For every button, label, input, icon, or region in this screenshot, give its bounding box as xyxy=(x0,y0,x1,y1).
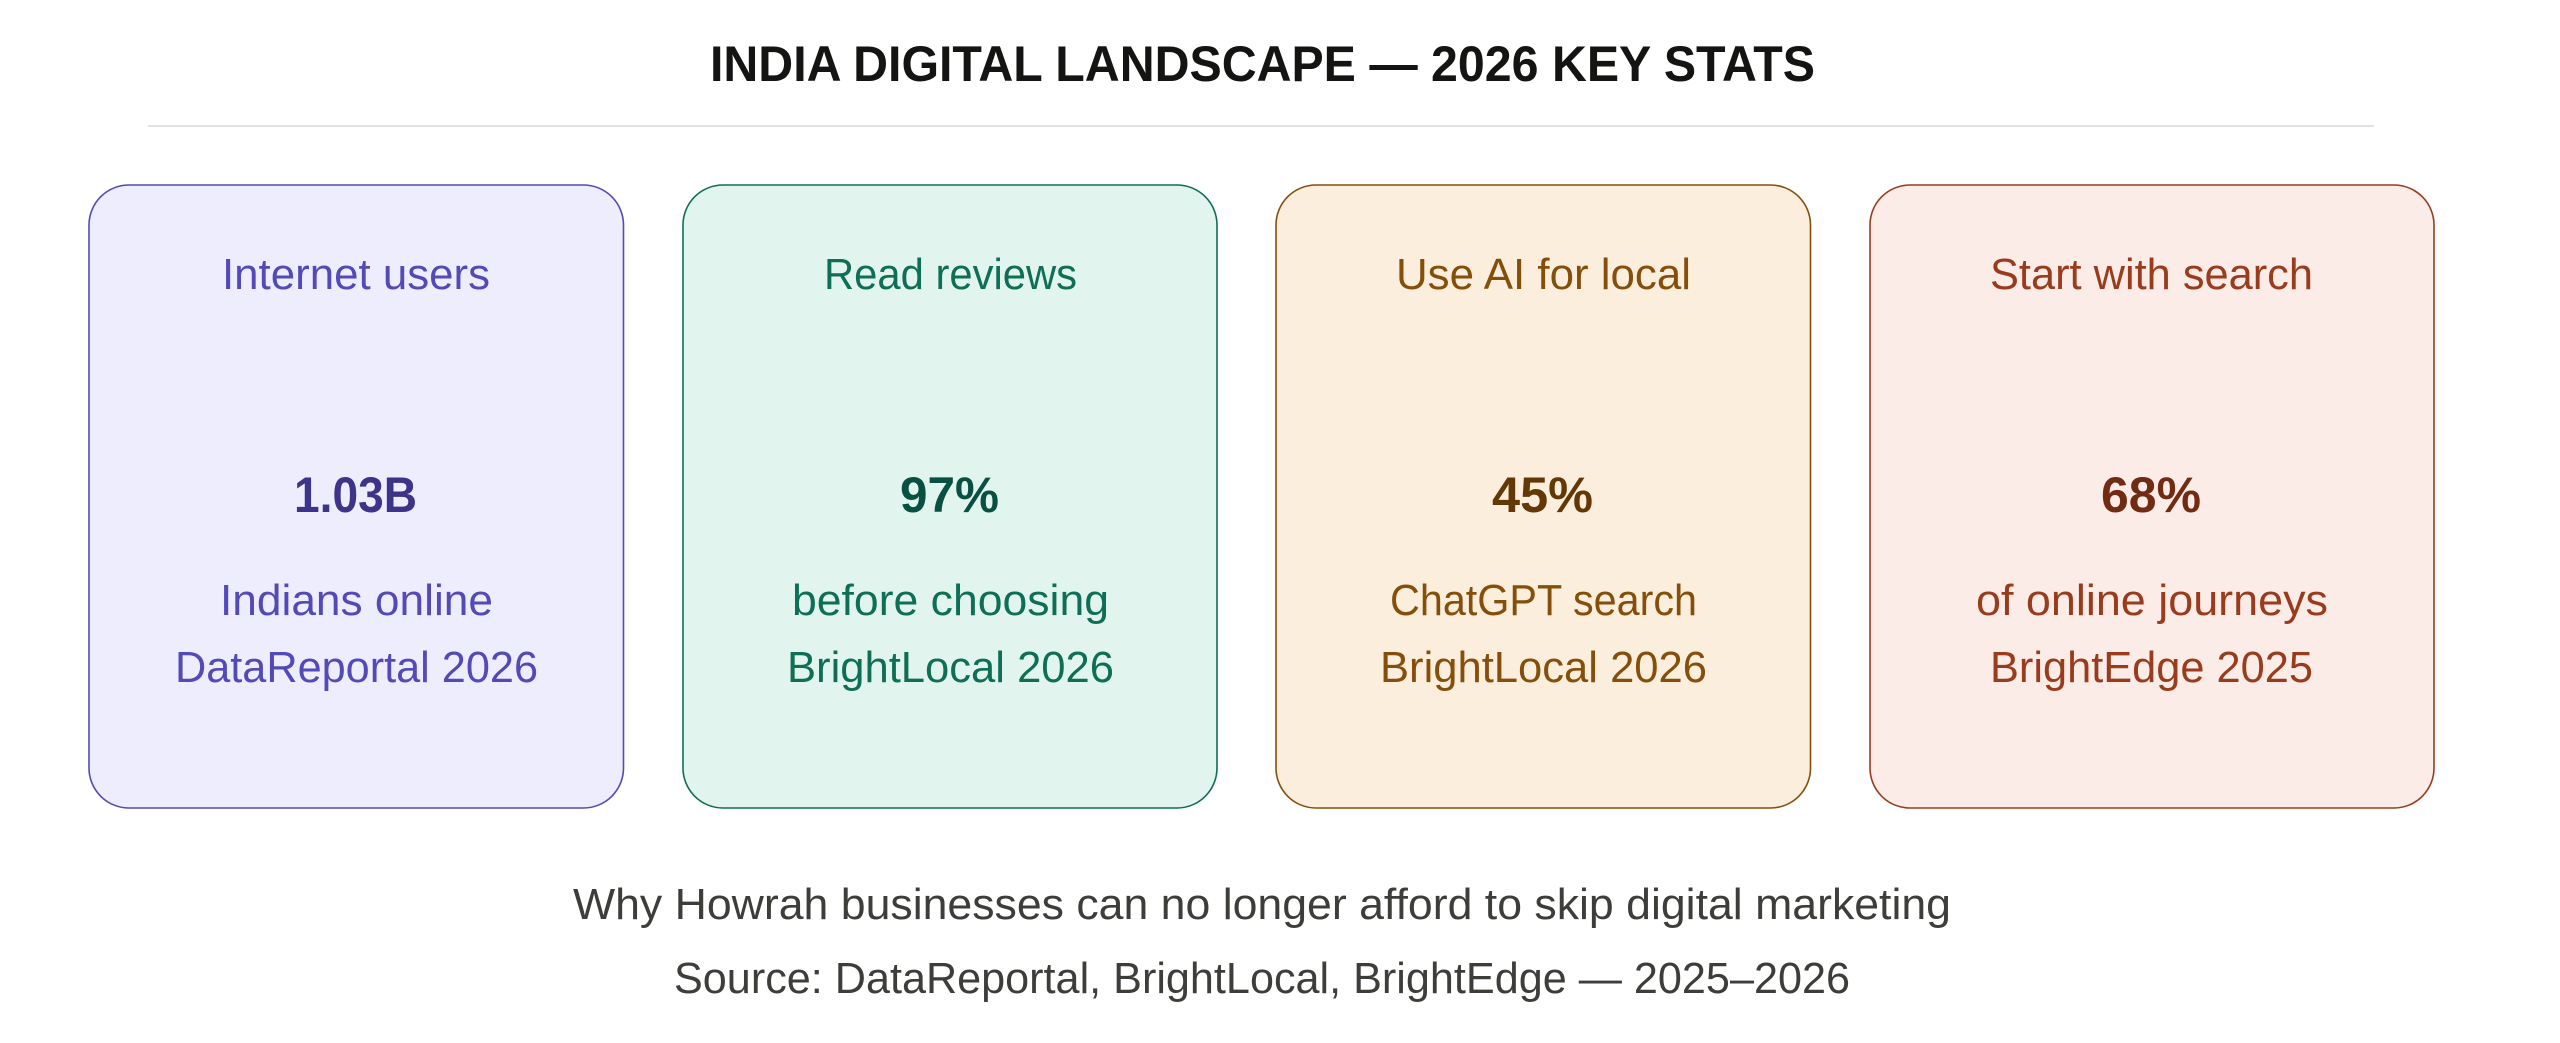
panel: internet users xyxy=(89,185,624,808)
stat value: 45%: 45% xyxy=(1492,467,1593,523)
card label: start with search: Start with search xyxy=(1990,250,2313,299)
stat description: Indians online: Indians online xyxy=(220,576,493,625)
stat description: of online journeys: of online journeys xyxy=(1976,576,2328,625)
stat value: 68%: 68% xyxy=(2101,467,2201,523)
stat description: ChatGPT search: ChatGPT search xyxy=(1390,576,1697,625)
stat source: BrightLocal: BrightLocal 2026 xyxy=(1380,643,1707,692)
stat source: BrightLocal: BrightLocal 2026 xyxy=(787,643,1114,692)
stat description: before choosing: before choosing xyxy=(792,576,1109,625)
card label: use AI for local: Use AI for local xyxy=(1396,250,1691,299)
stat value: 97%: 97% xyxy=(900,467,999,523)
stat source: BrightEdge: BrightEdge 2025 xyxy=(1990,643,2313,692)
footer source line: Source: DataReportal, BrightLocal, BrightEdge — 2025–2026 xyxy=(674,954,1850,1003)
panel: read reviews xyxy=(683,185,1217,808)
card label: read reviews: Read reviews xyxy=(824,250,1077,299)
footer caption: Why Howrah businesses can no longer afford to skip digital marketing xyxy=(573,880,1951,929)
stat value: 1.03B: 1.03B xyxy=(294,467,417,523)
panel: start with search xyxy=(1870,185,2434,808)
stat source: DataReportal: DataReportal 2026 xyxy=(175,643,538,692)
title: INDIA DIGITAL LANDSCAPE — 2026 KEY STATS xyxy=(710,36,1815,92)
card label: internet users: Internet users xyxy=(222,250,490,299)
panel: use AI for local xyxy=(1276,185,1810,808)
